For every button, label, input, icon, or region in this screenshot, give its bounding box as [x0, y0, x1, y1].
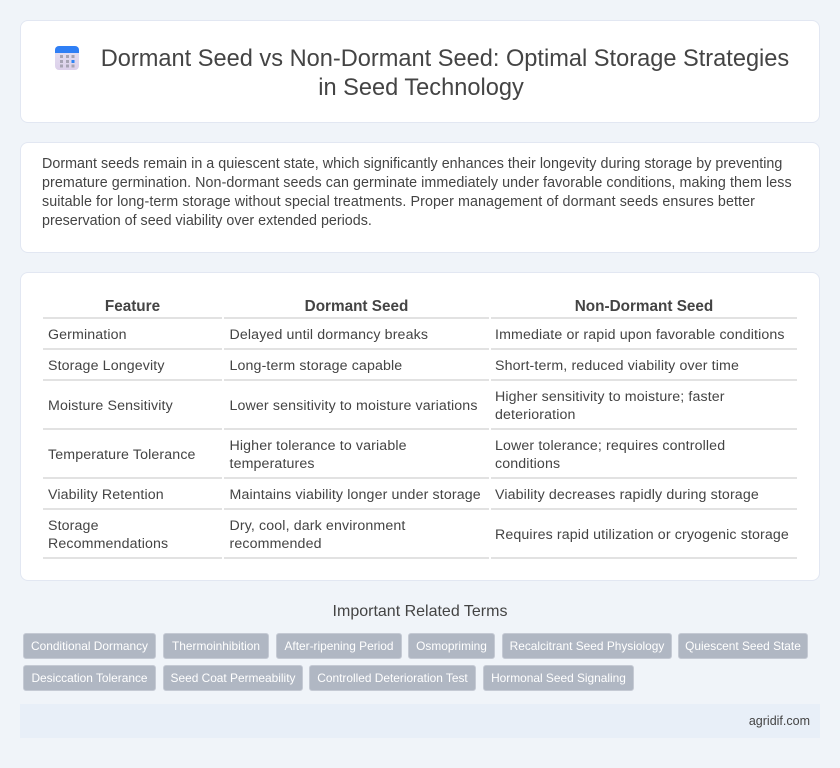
row: storage longevity	[48, 358, 739, 374]
heading: important related terms: Important Related Terms	[333, 603, 507, 620]
row: storage recommendations: Dry, cool, dark environment	[230, 518, 405, 534]
row: storage recommendations	[48, 518, 789, 552]
row: germination	[48, 327, 785, 343]
row: temperature tolerance: conditions	[495, 456, 560, 472]
row: viability retention: Viability decreases rapidly during storage	[495, 487, 759, 503]
text block: introduction: preservation of seed viability over extended periods.	[42, 213, 372, 229]
row: viability retention: Maintains viability longer under storage	[230, 487, 481, 503]
row: storage recommendations: Requires rapid utilization or cryogenic storage	[495, 527, 789, 543]
footer credit: agridif.com	[749, 714, 810, 728]
row: temperature tolerance: Higher tolerance to variable	[230, 438, 407, 454]
row: temperature tolerance	[48, 438, 725, 472]
row: moisture sensitivity: Lower sensitivity to moisture variations	[230, 398, 478, 414]
title	[101, 46, 789, 101]
row: viability retention: Viability Retention	[48, 487, 164, 503]
icon: calendar	[55, 46, 79, 70]
row: temperature tolerance: temperatures	[230, 456, 315, 472]
row: moisture sensitivity	[48, 389, 725, 423]
title: in Seed Technology	[318, 75, 524, 101]
table header	[105, 298, 713, 315]
text block: introduction	[42, 156, 792, 229]
row: germination: Delayed until dormancy breaks	[230, 327, 428, 343]
row: storage recommendations: recommended	[230, 536, 322, 552]
tag: Controlled Deterioration Test	[317, 671, 468, 685]
row: temperature tolerance: Temperature Tolerance	[48, 447, 196, 463]
tag: Osmopriming	[416, 639, 487, 653]
tag	[502, 633, 672, 659]
row: germination: Immediate or rapid upon favorable conditions	[495, 327, 785, 343]
text block: introduction: Dormant seeds remain in a quiescent state, which significantly enhances their longevity during storage by preventing	[42, 156, 782, 172]
tag	[163, 665, 303, 691]
tag: Conditional Dormancy	[31, 639, 148, 653]
row: germination: Germination	[48, 327, 127, 343]
footer bar	[20, 704, 820, 738]
tag	[163, 633, 269, 659]
tag: Thermoinhibition	[172, 639, 260, 653]
row: storage longevity: Short-term, reduced viability over time	[495, 358, 739, 374]
table header: Feature	[105, 298, 160, 315]
tag	[309, 665, 476, 691]
row: storage recommendations: Storage	[48, 518, 99, 534]
panel: comparison table	[20, 272, 820, 581]
tag	[23, 665, 156, 691]
tag	[408, 633, 495, 659]
row: moisture sensitivity: Moisture Sensitivity	[48, 398, 173, 414]
panel: introduction	[20, 142, 820, 253]
row: moisture sensitivity: Higher sensitivity to moisture; faster	[495, 389, 725, 405]
tag: Recalcitrant Seed Physiology	[510, 639, 664, 653]
row: moisture sensitivity: deterioration	[495, 407, 576, 423]
tag: Hormonal Seed Signaling	[491, 671, 626, 685]
table header: Dormant Seed	[305, 298, 408, 315]
text block: introduction: premature germination. Non-dormant seeds can germinate immediately under favorable conditions, making them less	[42, 175, 792, 191]
tag: Quiescent Seed State	[685, 639, 801, 653]
row: storage longevity: Storage Longevity	[48, 358, 165, 374]
row: storage recommendations: Recommendations	[48, 536, 168, 552]
row: storage longevity: Long-term storage capable	[230, 358, 402, 374]
row: viability retention	[48, 487, 759, 503]
row: temperature tolerance: Lower tolerance; requires controlled	[495, 438, 725, 454]
panel: title header	[20, 20, 820, 123]
tag: After-ripening Period	[284, 639, 394, 653]
title: Dormant Seed vs Non-Dormant Seed: Optimal Storage Strategies	[101, 46, 789, 72]
tag	[23, 633, 156, 659]
tag	[678, 633, 808, 659]
tag list: related terms	[23, 633, 808, 691]
tag	[483, 665, 634, 691]
tag	[276, 633, 402, 659]
table header: Non-Dormant Seed	[575, 298, 713, 315]
tag: Desiccation Tolerance	[31, 671, 148, 685]
tag: Seed Coat Permeability	[171, 671, 295, 685]
text block: introduction: suitable for long-term storage without special treatments. Proper management of dormant seeds ensures better	[42, 194, 755, 210]
